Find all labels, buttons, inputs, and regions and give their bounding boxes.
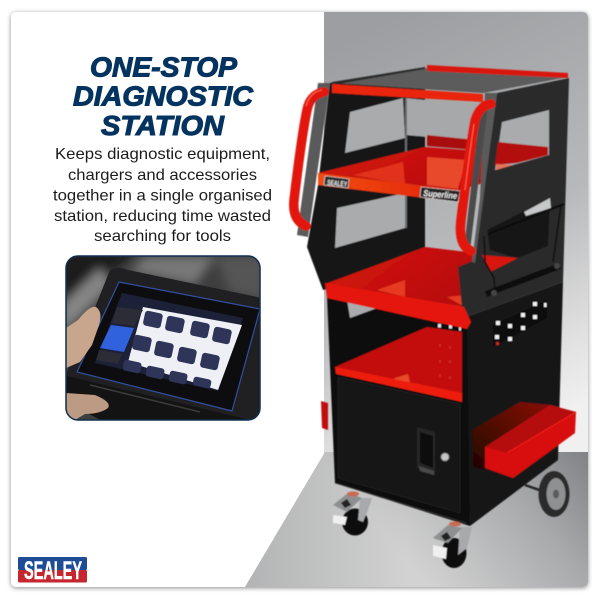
- logo: SEALEY: [18, 557, 87, 585]
- text block: description: station, reducing time wasted: [54, 208, 271, 225]
- tablet screen white area: [128, 307, 242, 390]
- screen sidebar highlight: [100, 325, 134, 352]
- text block: description: searching for tools: [94, 228, 231, 245]
- text block: description: chargers and accessories: [68, 167, 257, 184]
- title: DIAGNOSTIC: [73, 80, 254, 112]
- top shelf: [332, 68, 568, 93]
- text block: description: [53, 146, 272, 245]
- title: ONE-STOP: [90, 52, 237, 82]
- right handle: [460, 104, 491, 251]
- rear wheel: [525, 471, 570, 517]
- open compartment interior: [335, 300, 462, 400]
- right tray: [472, 402, 576, 478]
- panel: studio backdrop: [245, 12, 588, 587]
- lower left window: [335, 193, 405, 248]
- tablet screen bezel: [77, 282, 260, 411]
- bottom shelf: [325, 247, 517, 307]
- photo: diagnostic tablet in hand: [60, 250, 265, 425]
- door handle: [417, 427, 435, 475]
- cart: diagnostic trolley: [294, 65, 576, 568]
- bottom bracket: [486, 266, 560, 294]
- shelf label: SEALEY: SEALEY: [327, 178, 348, 189]
- bottom shelf front edge: [325, 283, 471, 329]
- hand: lower fingers: [66, 393, 109, 420]
- upper back panel: [307, 68, 425, 290]
- top bar: [488, 204, 564, 234]
- text block: description: together in a single organised: [53, 188, 272, 204]
- top shelf rear rim: [427, 65, 568, 78]
- cabinet front frame: [327, 296, 470, 526]
- lower cabinet side: [463, 282, 563, 526]
- shelf label: SEALEY: [324, 176, 349, 189]
- left handle backplate: [297, 83, 330, 237]
- compartment perforations: [438, 324, 461, 330]
- magazine pocket: [482, 198, 564, 296]
- shelf label: superline: Superline: [423, 188, 458, 201]
- compartment shelf lip: [335, 367, 462, 402]
- top shelf front rim: [332, 84, 483, 102]
- upper left window: [345, 98, 405, 153]
- tablet screen dark: [95, 293, 243, 391]
- door lock: [441, 453, 449, 461]
- front caster left: [333, 492, 372, 536]
- tablet body: [67, 268, 262, 422]
- right handle backplate: [472, 93, 497, 263]
- top shelf left rim: [332, 67, 425, 85]
- back dark strip: [405, 98, 407, 228]
- compartment shelf: [335, 327, 462, 402]
- hand: thumb and palm: [66, 307, 100, 368]
- left tray stub: [321, 401, 328, 430]
- right window: [495, 110, 549, 170]
- app tiles: [122, 310, 232, 389]
- logo: SEALEY: SEALEY: [24, 557, 82, 585]
- title: STATION: [101, 110, 225, 141]
- text block: description: Keeps diagnostic equipment,: [55, 146, 270, 163]
- middle shelf: [318, 147, 548, 190]
- middle shelf rear lip: [427, 135, 549, 156]
- title: [73, 52, 254, 141]
- side perforated window: [493, 300, 547, 347]
- front caster right: [433, 522, 472, 568]
- left handle: [294, 92, 324, 226]
- middle shelf front edge: [318, 173, 460, 202]
- back opening showing wall: [405, 98, 483, 140]
- cabinet door: [338, 377, 460, 513]
- upper right side panel: [458, 78, 569, 318]
